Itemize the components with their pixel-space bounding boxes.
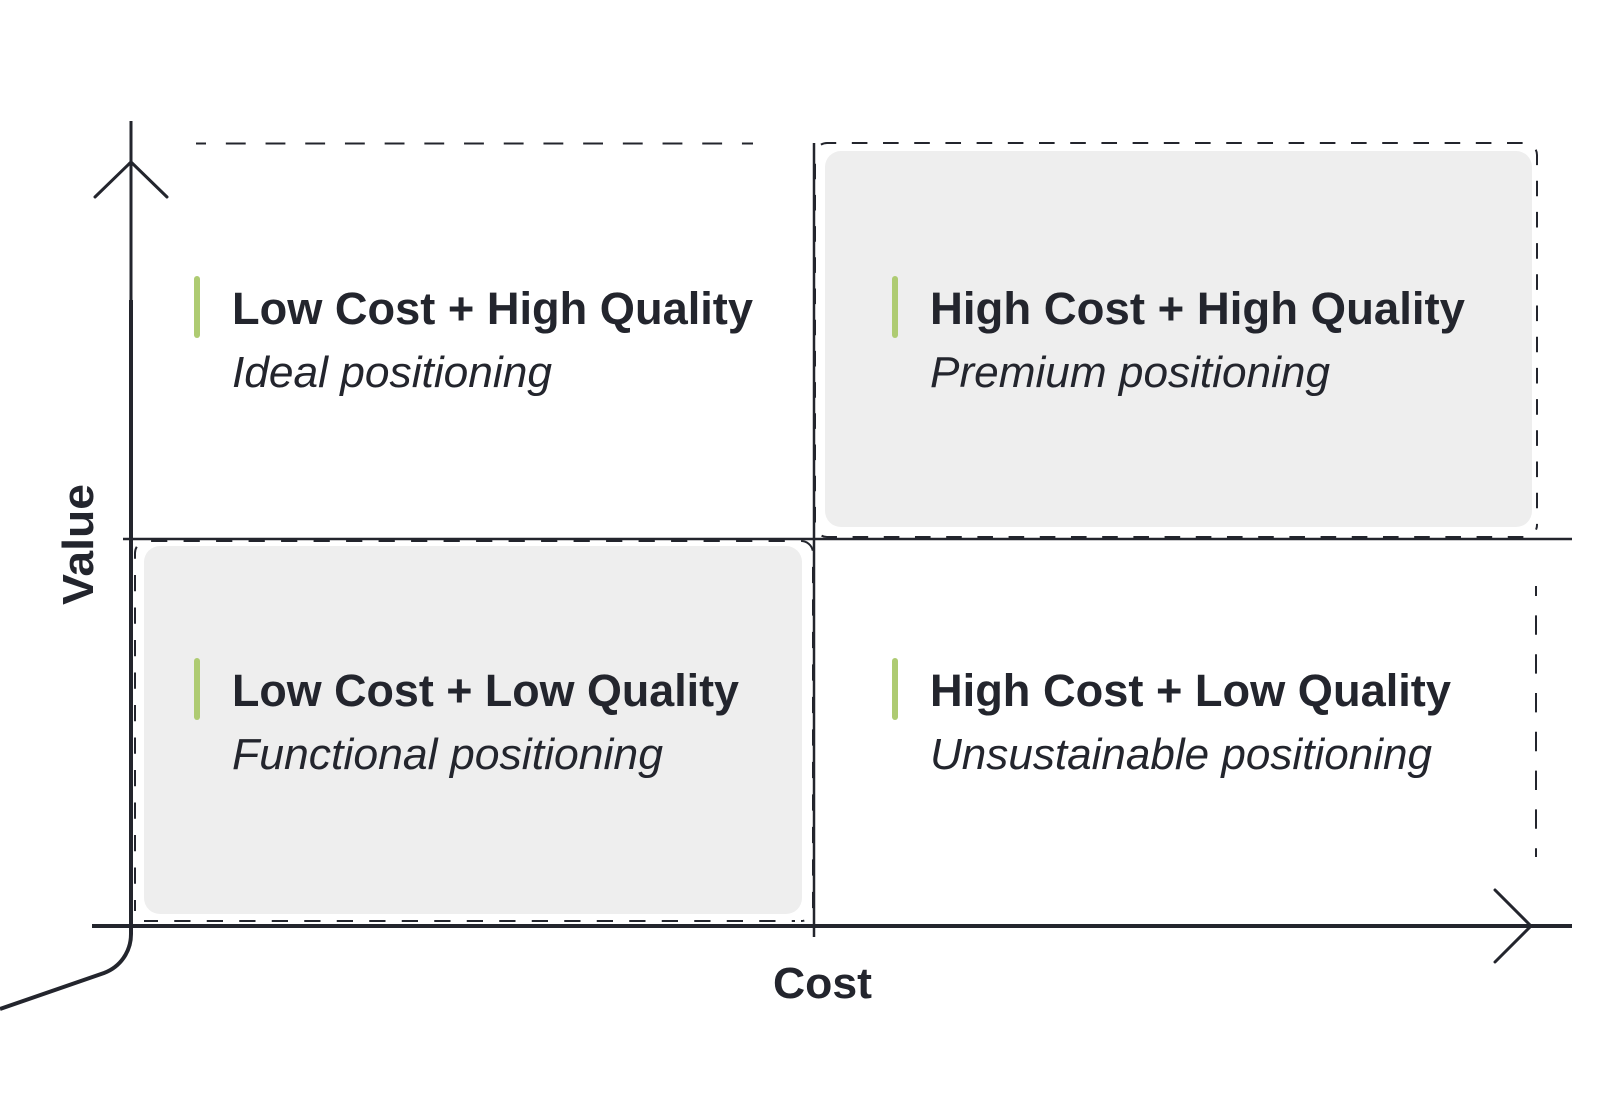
quadrant: high cost high quality [892, 276, 1465, 397]
arrow: value axis head [95, 162, 167, 197]
divider: vertical midline [813, 143, 815, 937]
arrow: cost axis head [1495, 890, 1531, 962]
axis: value (vertical) with tail [0, 121, 131, 1009]
accent bar [892, 276, 898, 338]
axis: cost (horizontal) [92, 924, 1572, 928]
axis label: value: Value [54, 484, 103, 605]
heading: Low Cost + Low Quality [232, 665, 739, 716]
accent bar [194, 658, 200, 720]
heading: Low Cost + High Quality [232, 283, 753, 334]
quadrant: low cost low quality [194, 658, 739, 779]
accent bar [892, 658, 898, 720]
dashed line: unsustainable quadrant right [1535, 586, 1537, 857]
subheading: Functional positioning [232, 730, 664, 779]
divider: horizontal midline [123, 538, 1572, 540]
subheading: Premium positioning [930, 348, 1331, 397]
subheading: Unsustainable positioning [930, 730, 1433, 779]
dashed outline: premium quadrant [815, 143, 1537, 537]
panel: premium background [825, 151, 1532, 527]
dashed outline: functional quadrant [135, 541, 813, 921]
quadrant: high cost low quality [892, 658, 1451, 779]
axis label: cost: Cost [773, 959, 872, 1008]
dashed line: ideal quadrant top [196, 142, 753, 144]
subheading: Ideal positioning [232, 348, 553, 397]
heading: High Cost + High Quality [930, 283, 1465, 334]
accent bar [194, 276, 200, 338]
heading: High Cost + Low Quality [930, 665, 1451, 716]
quadrant: low cost high quality [194, 276, 753, 397]
panel: functional background [144, 546, 802, 914]
